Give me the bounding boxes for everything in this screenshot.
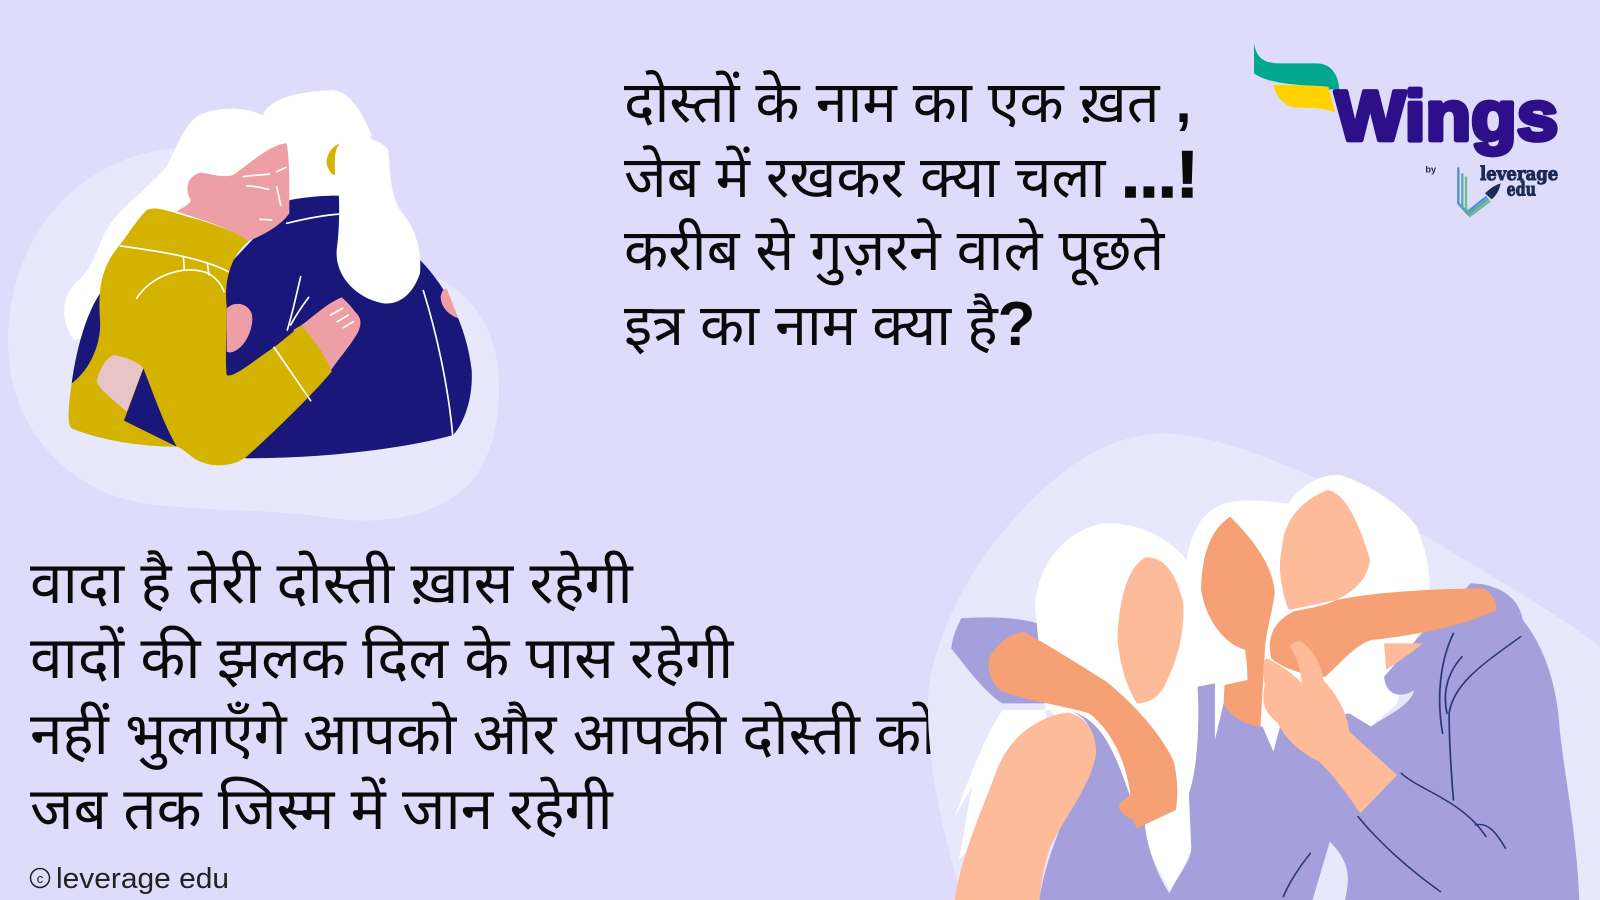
logo: Wings by leverage edu: Wings: [1335, 76, 1558, 155]
poem: bottom left: जब तक जिस्म में जान रहेगी: [30, 775, 613, 842]
illustration: three friends embracing: [928, 433, 1600, 900]
poem: top right: दोस्तों के नाम का एक ख़त ,: [624, 70, 1191, 135]
logo: Wings by leverage edu: [1254, 43, 1558, 216]
poem: bottom left: वादों की झलक दिल के पास रहेगी: [30, 624, 734, 691]
poem: top right: करीब से गुज़रने वाले पूछते: [624, 218, 1165, 287]
copyright: leverage edu: c: [37, 871, 44, 886]
copyright: leverage edu: leverage edu: [56, 863, 229, 895]
illustration: two friends hugging: [8, 90, 499, 520]
poem: bottom left: [30, 549, 937, 842]
poem: top right: [624, 70, 1198, 359]
logo: Wings by leverage edu: edu: [1507, 179, 1536, 201]
logo: Wings by leverage edu: leverage: [1480, 163, 1558, 185]
poem: top right: जेब में रखकर क्या चला ...!: [624, 137, 1198, 211]
poem: top right: इत्र का नाम क्या है?: [624, 290, 1036, 359]
poem: bottom left: वादा है तेरी दोस्ती ख़ास रहेगी: [30, 549, 634, 616]
logo: Wings by leverage edu: by: [1425, 165, 1437, 175]
poem: bottom left: नहीं भुलाएँगे आपको और आपकी दोस्ती को: [30, 700, 937, 770]
